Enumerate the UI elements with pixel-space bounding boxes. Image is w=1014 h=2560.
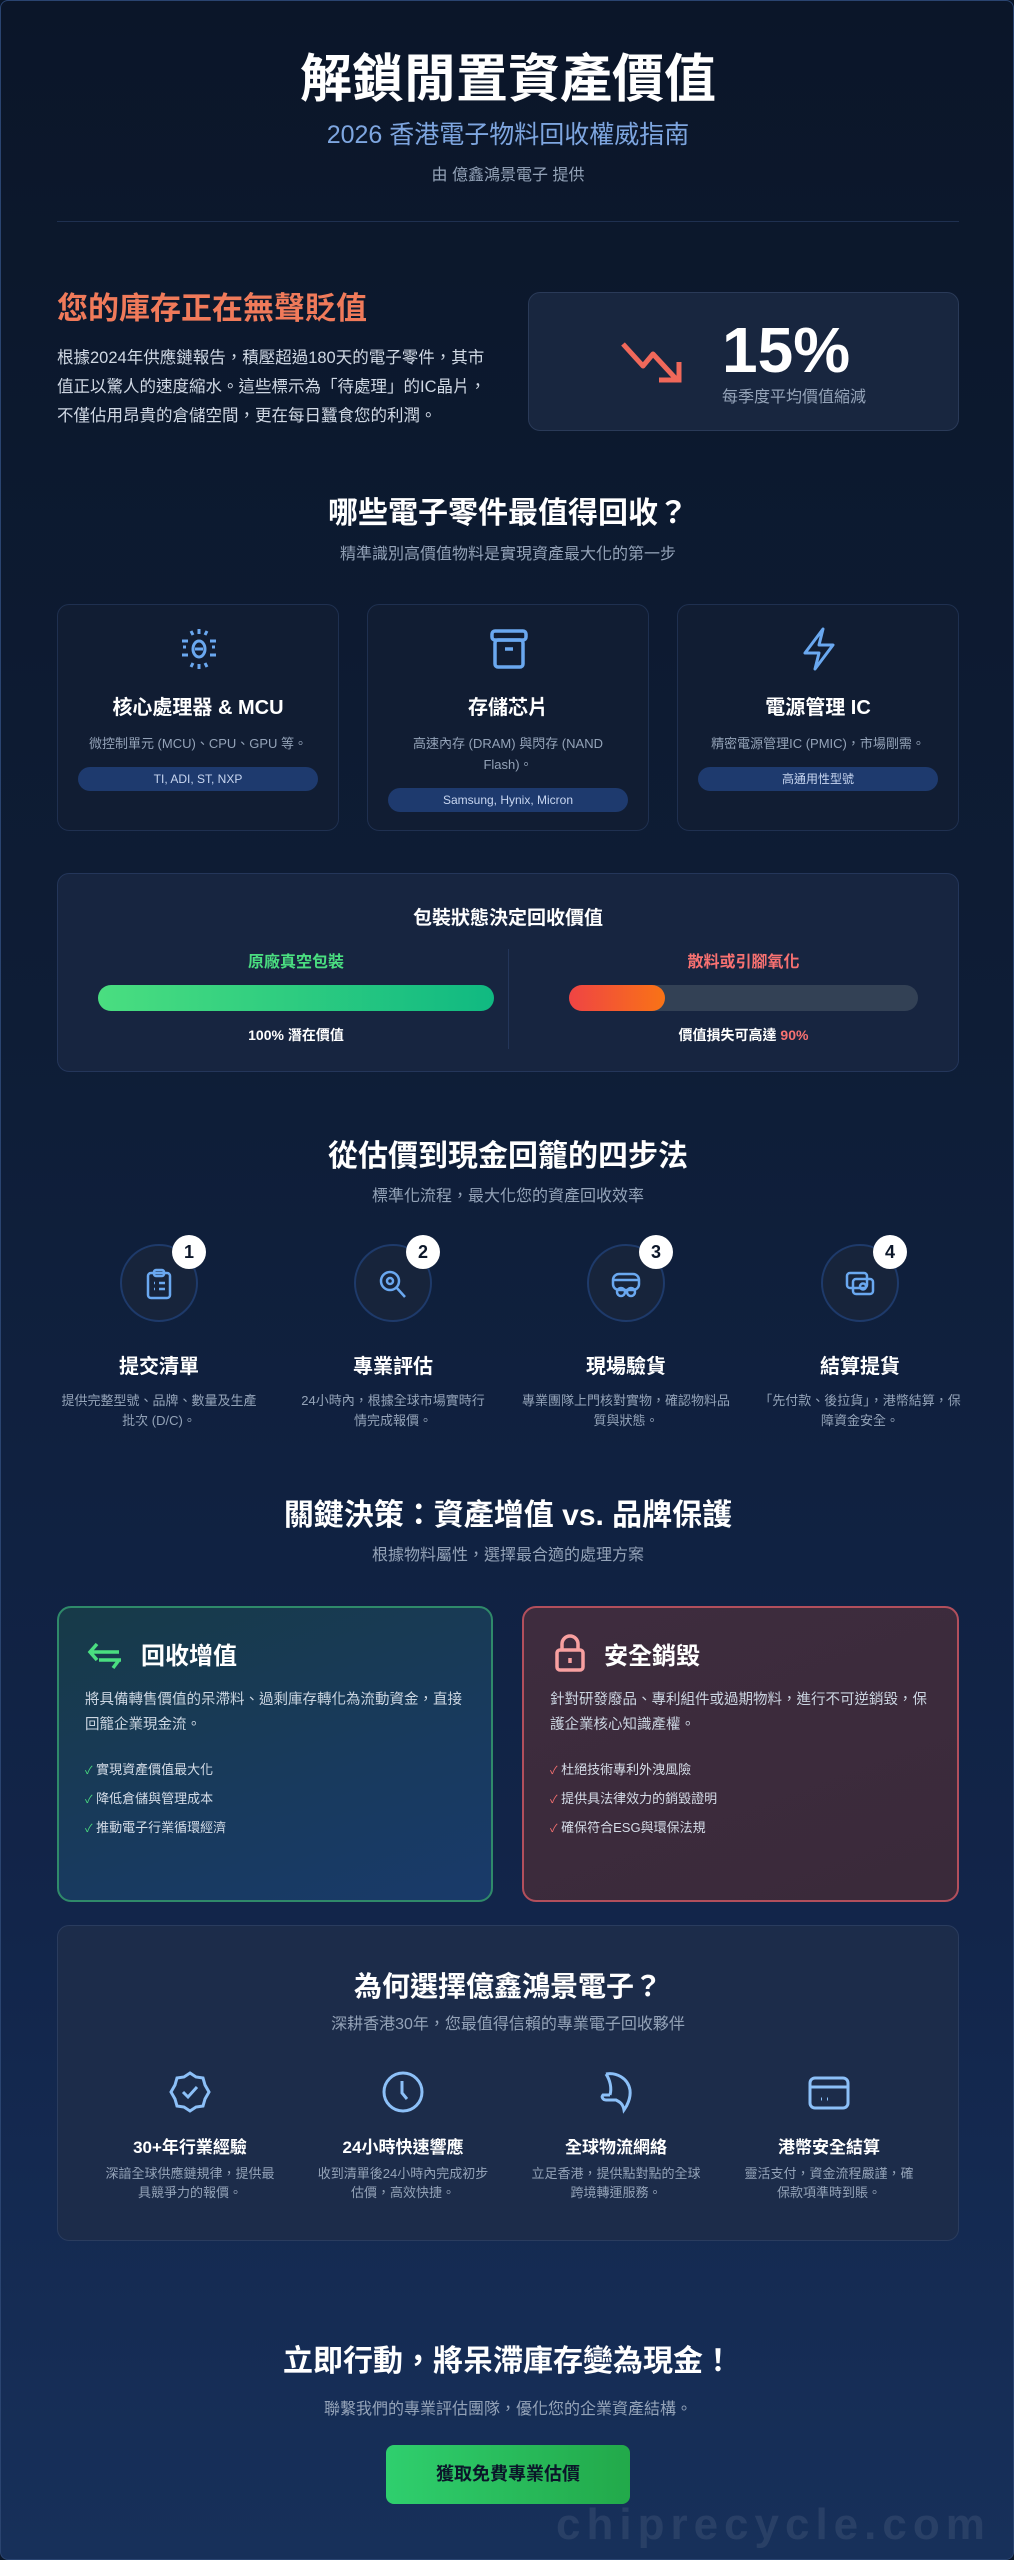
card title: 存儲芯片 [468, 697, 548, 719]
heading: steps: 從估價到現金回籠的四步法 [328, 1140, 688, 1173]
card title: 電源管理 IC [765, 697, 871, 719]
feature 3: 立足香港，提供點對點的全球跨境轉運服務。 [531, 2166, 700, 2200]
panel: recycle: 將具備轉售價值的呆滯料、過剩庫存轉化為流動資金，直接回籠企業現金流。 [85, 1692, 462, 1733]
icon: money [846, 1272, 874, 1296]
tag [698, 767, 938, 791]
heading: inventory: 您的庫存正在無聲貶值 [57, 291, 367, 326]
feature 2: 24小時快速響應 [343, 2138, 463, 2157]
card: MCU [57, 604, 339, 831]
feature 4 [744, 2076, 914, 2200]
panel: recycle: 回收增值 [141, 1643, 237, 1670]
CTA heading: 立即行動，將呆滯庫存變為現金！ [283, 2345, 733, 2378]
left: original packaging: 100% 潛在價值 [248, 1027, 344, 1043]
panel title: 包裝狀態決定回收價值 [413, 908, 603, 929]
right: loose packaging: 價值損失可高達 90% [679, 1027, 808, 1043]
subheading: components: 精準識別高價值物料是實現資產最大化的第一步 [340, 546, 676, 563]
panel: destroy: ✓ 提供具法律效力的銷毀證明 [550, 1791, 717, 1806]
panel: destroy [522, 1606, 959, 1902]
card desc: 精密電源管理IC (PMIC)，市場剛需。 [711, 736, 925, 751]
step 2: 2 [418, 1242, 428, 1262]
stat number: 15% [722, 314, 850, 386]
CTA subtext: 聯繫我們的專業評估團隊，優化您的企業資產結構。 [324, 2401, 692, 2418]
step 1: 提供完整型號、品牌、數量及生產批次 (D/C)。 [61, 1393, 256, 1428]
panel: why choose us [57, 1925, 959, 2241]
step 3 [522, 1235, 730, 1428]
bar: 27% [569, 985, 918, 1011]
feature 3 [531, 2072, 700, 2200]
card: memory [367, 604, 649, 831]
stat card [528, 292, 959, 431]
panel: recycle: ✓ 推動電子行業循環經濟 [85, 1820, 226, 1835]
step 3: 專業團隊上門核對實物，確認物料品質與狀態。 [522, 1393, 730, 1428]
tag [78, 767, 318, 791]
panel: packaging [57, 873, 959, 1072]
stat label: 每季度平均價值縮減 [722, 389, 866, 406]
panel: recycle: ✓ 降低倉儲與管理成本 [85, 1791, 213, 1806]
tag: TI, ADI, ST, NXP [154, 772, 242, 786]
left: original packaging [98, 953, 494, 1043]
provider: 由 億鑫鴻景電子 提供 [432, 167, 584, 184]
step 4: 4 [885, 1242, 895, 1262]
right: loose packaging: 散料或引腳氧化 [687, 954, 800, 971]
panel: recycle [57, 1606, 493, 1902]
panel: destroy: 安全銷毀 [604, 1643, 700, 1670]
heading: components: 哪些電子零件最值得回收？ [328, 497, 688, 530]
tag: 高通用性型號 [782, 772, 854, 786]
icon: truck [612, 1272, 640, 1298]
feature 2 [318, 2072, 488, 2200]
CTA button [386, 2445, 630, 2504]
CTA button: 獲取免費專業估價 [436, 2464, 580, 2484]
watermark: chiprecycle.com [556, 2500, 991, 2549]
tag [388, 788, 628, 812]
feature 1: 深諳全球供應鏈規律，提供最具競爭力的報價。 [105, 2166, 274, 2200]
step 1 [61, 1235, 256, 1428]
step 1: 提交清單 [119, 1356, 199, 1378]
card desc: 微控制單元 (MCU)、CPU、GPU 等。 [89, 736, 307, 751]
feature 1: 30+年行業經驗 [133, 2138, 247, 2157]
panel: destroy: 針對研發廢品、專利組件或過期物料，進行不可逆銷毀，保護企業核心知識產權。 [550, 1692, 927, 1733]
step 4: 「先付款、後拉貨」，港幣結算，保障資金安全。 [759, 1393, 961, 1428]
panel: why choose us: 深耕香港30年，您最值得信賴的專業電子回收夥伴 [331, 2016, 685, 2033]
icon: bolt [803, 628, 835, 670]
step 2 [301, 1235, 485, 1428]
step 4 [759, 1235, 961, 1428]
feature 3: 全球物流網絡 [565, 2138, 667, 2157]
step 4: 結算提貨 [820, 1356, 900, 1378]
panel: destroy: ✓ 杜絕技術專利外洩風險 [550, 1762, 691, 1777]
icon: lock [555, 1634, 585, 1672]
step 3: 現場驗貨 [586, 1356, 666, 1378]
icon: archive [490, 629, 528, 669]
step 2: 專業評估 [353, 1356, 433, 1378]
icon: down arrow [621, 342, 682, 382]
feature 2: 收到清單後24小時內完成初步估價，高效快捷。 [318, 2166, 488, 2200]
card desc: 高速內存 (DRAM) 與閃存 (NAND Flash)。 [413, 736, 603, 772]
panel: destroy: ✓ 確保符合ESG與環保法規 [550, 1820, 706, 1835]
icon: chip [182, 629, 216, 669]
step 2: 24小時內，根據全球市場實時行情完成報價。 [301, 1393, 485, 1428]
feature 4: 港幣安全結算 [778, 2138, 880, 2157]
paragraph: inventory: 根據2024年供應鏈報告，積壓超過180天的電子零件，其市值正以驚人的速度縮水。這些標示為「待處理」的IC晶片，不僅佔用昂貴的倉儲空間，更在每日蠶食您的利潤。 [57, 349, 486, 425]
icon: search [380, 1270, 406, 1298]
bar: 100% [98, 985, 494, 1011]
left: original packaging: 原廠真空包裝 [248, 954, 344, 971]
card: PMIC [677, 604, 959, 831]
tag: Samsung, Hynix, Micron [443, 793, 573, 807]
right: loose packaging [569, 953, 918, 1043]
step 3: 3 [651, 1242, 661, 1262]
panel: why choose us: 為何選擇億鑫鴻景電子？ [354, 1971, 662, 2002]
panel: recycle: ✓ 實現資產價值最大化 [85, 1762, 213, 1777]
subheading: decision: 根據物料屬性，選擇最合適的處理方案 [372, 1547, 644, 1564]
title: 解鎖閒置資產價值 [300, 51, 716, 109]
subheading: steps: 標準化流程，最大化您的資產回收效率 [372, 1188, 644, 1205]
step 1: 1 [184, 1242, 194, 1262]
card title: 核心處理器 & MCU [112, 697, 284, 719]
heading: decision: 關鍵決策：資產增值 vs. 品牌保護 [284, 1499, 732, 1532]
subtitle: 2026 香港電子物料回收權威指南 [327, 121, 689, 149]
feature 1 [105, 2071, 274, 2200]
feature 4: 靈活支付，資金流程嚴謹，確保款項準時到賬。 [744, 2166, 914, 2200]
icon: clipboard [146, 1268, 172, 1300]
icon: exchange [88, 1642, 121, 1669]
